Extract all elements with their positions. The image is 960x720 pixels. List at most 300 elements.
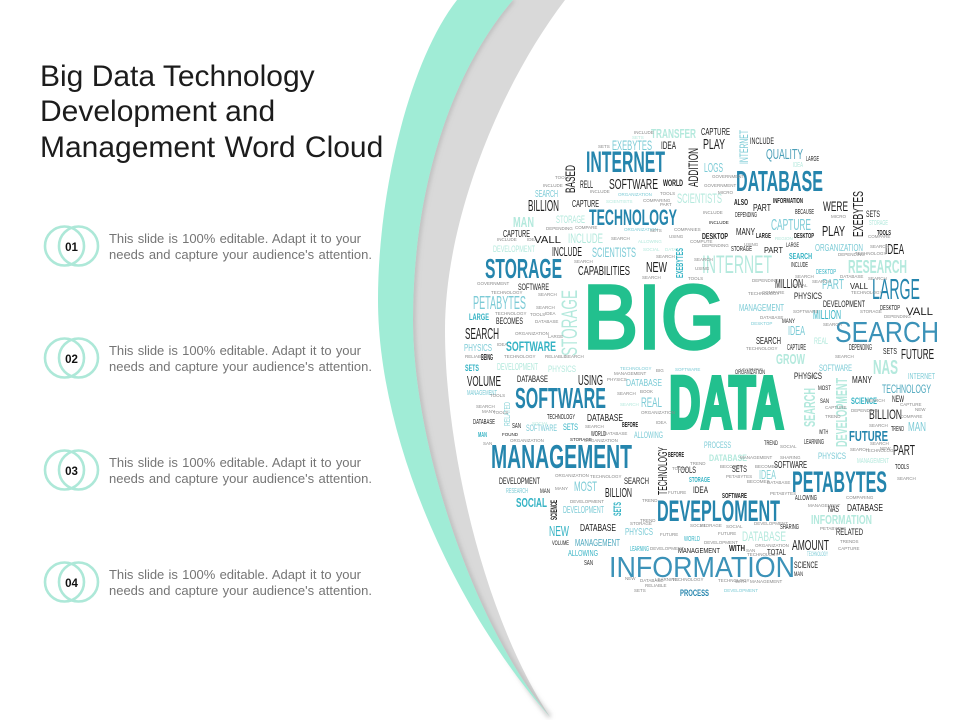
tiny filler words: DEPENDING — [546, 226, 573, 231]
tiny filler words: PHYSICS — [607, 377, 627, 382]
tiny filler words: LEARNING — [655, 577, 679, 582]
title: Development and — [40, 95, 275, 128]
black medium words: IDEA — [661, 140, 676, 152]
black medium words: RELATED — [836, 527, 863, 537]
tiny filler words: ORGANIZATION — [641, 410, 675, 415]
tiny filler words: TECHNOLOGY — [590, 474, 622, 479]
list item 04: needs and capture your audience's attention. — [109, 583, 372, 598]
blue and teal medium words: CAPTURE — [771, 217, 811, 234]
black medium words: SEARCH — [465, 326, 499, 343]
black medium words: TREND — [891, 426, 904, 433]
blue and teal medium words: PETABYTES — [473, 293, 526, 313]
tiny filler words: SCIENTISTS — [606, 199, 633, 204]
black medium words: PART — [764, 246, 783, 255]
tiny filler words: DATABASE — [604, 431, 627, 436]
tiny filler words: FUTURE — [668, 490, 686, 495]
tiny filler words: USING — [669, 234, 684, 239]
black medium words: EXEBYTES — [850, 191, 867, 237]
tiny filler words: INCLUDE — [590, 189, 610, 194]
word: RESEARCH: RESEARCH — [848, 257, 907, 277]
tiny filler words: TECHNOLOGY — [747, 552, 779, 557]
tiny filler words: ORGANIZATION — [624, 227, 658, 232]
tiny filler words: SEARCH — [538, 292, 557, 297]
black medium words: MANY — [736, 227, 755, 238]
tiny filler words: SEARCH — [823, 322, 842, 327]
blue and teal medium words: SETS — [612, 502, 624, 516]
tiny filler words: TECHNOLOGY — [491, 290, 523, 295]
black medium words: PART — [753, 203, 771, 214]
blue and teal medium words: RESEARCH — [506, 488, 528, 495]
mint medium words: MANAGEMENT — [857, 458, 889, 465]
mint medium words: TRANSFER — [651, 126, 696, 141]
blue and teal medium words: FUTURE — [849, 428, 888, 445]
tiny filler words: NEW — [625, 576, 636, 581]
tiny filler words: BECOMES — [720, 464, 743, 469]
tiny filler words: LEARNING — [740, 367, 764, 372]
tiny filler words: SETS — [632, 135, 644, 140]
blue and teal medium words: EXEBYTES — [612, 137, 652, 153]
black medium words: TOOLS — [895, 464, 909, 471]
black medium words: INCLUDE — [750, 136, 774, 146]
tiny filler words: DATABASE — [535, 319, 558, 324]
black medium words: TREND — [764, 441, 778, 447]
black medium words: CAPTURE — [572, 199, 599, 210]
black medium words: SOFTWARE — [518, 282, 549, 292]
tiny filler words: MANAGEMENT — [808, 503, 841, 508]
tiny filler words: USING — [695, 266, 710, 271]
black medium words: USING — [578, 372, 603, 389]
tiny filler words: SEARCH — [611, 236, 630, 241]
tiny filler words: FOUND — [502, 432, 519, 437]
tiny filler words: SETS — [650, 228, 662, 233]
tiny filler words: DATA — [665, 247, 676, 252]
tiny filler words: SEARCH — [642, 275, 661, 280]
blue and teal medium words: PHYSICS — [625, 527, 653, 538]
tiny filler words: REGION — [775, 236, 793, 241]
tiny filler words: MICRO — [718, 190, 733, 195]
blue and teal medium words: IDEA — [788, 323, 805, 338]
tiny filler words: COMPARING — [846, 495, 874, 500]
black medium words: MILLION — [775, 276, 803, 291]
tiny filler words: TECHNOLOGY — [748, 291, 780, 296]
tiny filler words: DEPENDING — [884, 314, 911, 319]
list item 01: needs and capture your audience's attention. — [109, 247, 372, 262]
black medium words: VOLUME — [552, 541, 569, 547]
tiny filler words: IDEA — [806, 374, 817, 379]
blue and teal medium words — [464, 130, 935, 598]
blue and teal medium words: SCIENTISTS — [592, 244, 636, 260]
list item 04: 04 — [65, 578, 78, 590]
black medium words: TOOLS — [677, 465, 696, 475]
black medium words: DATABASE — [587, 413, 623, 424]
word: SOFTWARE: SOFTWARE — [515, 383, 606, 415]
tiny filler words: ORGANIZATION — [555, 473, 589, 478]
black medium words: VALL — [534, 235, 561, 246]
word: STORAGE: STORAGE — [485, 253, 562, 284]
black medium words: LARGE — [786, 243, 799, 249]
title: Management Word Cloud — [40, 131, 383, 164]
tiny filler words: COMPARE — [575, 225, 597, 230]
black medium words: WITH — [729, 544, 745, 553]
mint medium words: INFORMATION — [811, 512, 872, 527]
tiny filler words: DEVELOPMENT — [570, 499, 604, 504]
blue and teal medium words: INTERNET — [908, 372, 935, 381]
tiny filler words: TOOLS — [688, 276, 703, 281]
black medium words: WERE — [823, 198, 848, 214]
black medium words: LARGE — [756, 233, 771, 240]
tiny filler words: SEARCH — [476, 404, 495, 409]
tiny filler words: SAN — [746, 548, 755, 553]
tiny filler words: PETABYTES — [726, 474, 752, 479]
tiny filler words: TECHNOLOGY — [504, 354, 536, 359]
black medium words: MANY — [782, 319, 795, 325]
tiny filler words: TECHNOLOGY — [718, 578, 750, 583]
black medium words: NEW — [646, 259, 668, 276]
blue and teal medium words: ALLOWING — [634, 430, 663, 440]
black medium words: BEFORE — [622, 422, 638, 429]
blue and teal medium words: DESKTOP — [816, 269, 836, 276]
blue and teal medium words: SOFTWARE — [526, 423, 557, 433]
tiny filler words: BECOMES — [747, 479, 770, 484]
black medium words: AMOUNT — [792, 537, 829, 554]
tiny filler words — [465, 130, 926, 593]
tiny filler words: DEVELOPMENT — [650, 546, 684, 551]
tiny filler words: SEARCH — [850, 447, 869, 452]
tiny filler words: DEPENDING — [838, 252, 865, 257]
blue and teal medium words: MOST — [574, 478, 597, 494]
word: DATA: DATA — [669, 361, 784, 444]
blue and teal medium words: STORAGE — [689, 477, 710, 484]
list item 02: needs and capture your audience's attention. — [109, 359, 372, 374]
black medium words: INCLUDE — [791, 262, 808, 269]
black medium words: MAN — [540, 489, 550, 495]
tiny filler words: SOCIAL — [791, 283, 808, 288]
tiny filler words: SEARCH — [536, 305, 555, 310]
black medium words: BASED — [562, 165, 578, 193]
blue and teal medium words: NEW — [549, 523, 569, 540]
black medium words: VOLUME — [467, 373, 501, 390]
tiny filler words: TOOLS — [493, 410, 508, 415]
tiny filler words: BOOK — [640, 389, 653, 394]
black medium words: BEING — [481, 353, 493, 362]
black medium words: BILLION — [869, 406, 902, 422]
mint medium words: DATABASE — [709, 453, 747, 463]
black medium words: DATABASE — [847, 503, 883, 514]
list item 01: 01 — [65, 242, 78, 254]
black medium words: DESKTOP — [702, 232, 728, 241]
black medium words: DATABASE — [580, 523, 616, 534]
black medium words: BEFORE — [668, 452, 684, 459]
tiny filler words: TECHNOLOGY — [672, 577, 704, 582]
blue and teal medium words: WORLD — [684, 536, 700, 543]
curved swoosh: grey band — [413, 0, 565, 717]
black medium words: WITH — [819, 430, 828, 436]
tiny filler words: GOVERNMENT — [704, 183, 737, 188]
tiny filler words: TECHNOLOGY — [865, 448, 897, 453]
tiny filler words: COMPARING — [643, 198, 671, 203]
tiny filler words: TOOLS — [555, 175, 570, 180]
black medium words: IDEA — [885, 241, 904, 258]
blue and teal medium words: SOFTWARE — [819, 363, 852, 373]
black medium words: SAN — [820, 399, 829, 405]
tiny filler words: BIG — [656, 368, 664, 373]
tiny filler words: PART — [660, 202, 672, 207]
tiny filler words: TECHNOLOGY — [620, 366, 652, 371]
blue and teal medium words: SETS — [563, 422, 578, 432]
list item 03: 03 — [65, 466, 78, 478]
tiny filler words: INCLUDE — [709, 220, 729, 225]
black medium words: TECHNOLOGY — [655, 447, 670, 495]
blue and teal medium words: MILLION — [813, 307, 841, 322]
tiny filler words: DEPENDING — [752, 278, 779, 283]
black medium words: DESKTOP — [880, 305, 900, 312]
black medium words: INCLUDE — [552, 244, 582, 259]
tiny filler words: TREND — [825, 414, 841, 419]
list item 02: This slide is 100% editable. Adapt it to your — [109, 343, 362, 358]
black medium words: PLAY — [822, 223, 845, 240]
blue and teal medium words: SCIENCE — [851, 396, 877, 406]
tiny filler words: STORAGE — [630, 521, 652, 526]
black medium words: SETS — [883, 347, 897, 356]
black medium words: BILLION — [605, 485, 632, 500]
tiny filler words: ORGANIZATION — [515, 331, 549, 336]
tiny filler words: TOOLS — [672, 466, 687, 471]
mint medium words: STORAGE — [556, 214, 585, 226]
tiny filler words: TECHNOLOGY — [851, 290, 883, 295]
tiny filler words: IDEA — [527, 237, 538, 242]
list item 04: This slide is 100% editable. Adapt it to your — [109, 567, 362, 582]
mint medium words: DATABASE — [742, 528, 786, 544]
word cloud — [464, 126, 939, 598]
mint medium words: IDEA — [759, 467, 776, 482]
list item 02 — [45, 338, 372, 378]
tiny filler words: CAPTURE — [825, 405, 847, 410]
list item 02: 02 — [65, 354, 78, 366]
black medium words: TOTAL — [767, 548, 786, 557]
list item 03: This slide is 100% editable. Adapt it to your — [109, 455, 362, 470]
tiny filler words: MANAGEMENT — [740, 455, 773, 460]
tiny filler words: DATABASE — [760, 315, 783, 320]
tiny filler words: COMPARE — [762, 290, 784, 295]
black medium words: MOST — [818, 386, 831, 392]
tiny filler words: TOOLS — [660, 191, 675, 196]
black medium words: CAPTURE — [701, 127, 730, 138]
black medium words: BILLION — [528, 198, 559, 215]
black medium words: ADDITION — [685, 148, 701, 187]
tiny filler words: SOCIAL — [532, 421, 549, 426]
blue and teal medium words: EXEBYTES — [675, 248, 686, 278]
black medium words — [465, 127, 934, 578]
tiny filler words: DEVELOPMENT — [704, 540, 738, 545]
tiny filler words: MANAGEMENT — [614, 371, 647, 376]
tiny filler words: SOFTWARE — [675, 367, 700, 372]
tiny filler words: MICRO — [831, 214, 846, 219]
mint medium words: GROW — [776, 351, 806, 368]
tiny filler words: INCLUDE — [497, 237, 517, 242]
tiny filler words: STORAGE — [570, 437, 592, 442]
black medium words: TECHNOLOGY — [547, 414, 575, 421]
list item 03: needs and capture your audience's attention. — [109, 471, 372, 486]
black medium words: DESKTOP — [794, 233, 814, 240]
black medium words: PHYSICS — [794, 291, 822, 301]
blue and teal medium words: REAL — [641, 394, 662, 410]
blue and teal medium words: DATABASE — [626, 378, 662, 389]
tiny filler words: DEVELOPMENT — [754, 521, 788, 526]
tiny filler words: SEARCH — [795, 274, 814, 279]
tiny filler words: SEARCH — [585, 424, 604, 429]
tiny filler words: SEARCH — [574, 259, 593, 264]
tiny filler words: GOVERNMENT — [477, 281, 510, 286]
tiny filler words: TECHNOLOGY — [495, 311, 527, 316]
tiny filler words: BECOMES — [755, 464, 778, 469]
tiny filler words: ORGANIZATION — [755, 543, 789, 548]
tiny filler words: RELIABLE — [465, 354, 487, 359]
tiny filler words: DEPENDING — [851, 408, 878, 413]
tiny filler words: TREND — [690, 461, 706, 466]
tiny filler words: TECHNOLOGY — [855, 251, 887, 256]
blue and teal medium words: ALLOWING — [568, 549, 598, 558]
tiny filler words: COMPANIES — [674, 227, 701, 232]
tiny filler words: PETABYTES — [820, 526, 846, 531]
black medium words: BECAUSE — [795, 209, 814, 216]
mint medium words: STORAGE — [869, 220, 888, 227]
blue and teal medium words: SEARCH — [535, 189, 558, 200]
tiny filler words: SEARCH — [812, 279, 831, 284]
tiny filler words: TECHNOLOGY — [746, 346, 778, 351]
list item 03 — [45, 450, 372, 490]
black medium words: VALL — [906, 306, 933, 318]
tiny filler words: DATABASE — [767, 480, 790, 485]
black medium words: MAN — [794, 572, 803, 578]
list item 04 — [45, 562, 372, 602]
tiny filler words: LARGE — [548, 334, 563, 339]
blue and teal medium words: LARGE — [469, 312, 489, 322]
mint medium words: INCLUDE — [568, 230, 603, 246]
word: DEVEPLOMENT: DEVEPLOMENT — [657, 495, 780, 528]
black medium words: SEARCH — [756, 336, 781, 347]
tiny filler words: DATABASE — [840, 274, 863, 279]
black medium words: SAN — [584, 560, 593, 567]
tiny filler words: SEARCH — [870, 441, 889, 446]
tiny filler words: NEW — [915, 407, 926, 412]
black medium words: RELL — [580, 179, 593, 191]
black medium words: SAN — [512, 423, 521, 430]
black medium words: BECOMES — [496, 316, 523, 326]
mint medium words: IDEA — [793, 162, 803, 169]
mint medium words: PHYSICS — [548, 364, 576, 374]
black medium words: MANY — [852, 375, 872, 386]
tiny filler words: RELIABLE — [545, 354, 567, 359]
blue and teal medium words: SOFTWARE — [506, 338, 556, 354]
tiny filler words: TREND — [642, 498, 658, 503]
word: INTERNET mint: INTERNET — [702, 251, 772, 279]
black medium words: SOFTWARE — [722, 493, 747, 500]
blue and teal medium words: PART — [822, 276, 844, 293]
tiny filler words: SOCIAL — [726, 524, 743, 529]
mint medium words: DEVELOPMENT — [493, 244, 535, 254]
blue and teal medium words: SETS — [465, 363, 479, 373]
tiny filler words: IDEA — [497, 342, 508, 347]
black medium words: DEVELOPMENT — [823, 299, 865, 309]
black medium words: SETS — [866, 209, 880, 219]
word: MANAGEMENT: MANAGEMENT — [491, 438, 632, 475]
word: DEVELOPMENT vertical: DEVELOPMENT — [834, 378, 851, 447]
mint medium words — [493, 126, 898, 544]
black medium words: SCIENCE — [794, 560, 818, 570]
black medium words: CAPTURE — [503, 229, 530, 240]
tiny filler words: DEPENDING — [702, 243, 729, 248]
mint medium words: DEVELOPMENT — [497, 362, 538, 373]
mint medium words: SCIENTISTS — [677, 190, 722, 206]
blue and teal medium words: LOGS — [704, 160, 723, 175]
black medium words: SHARING — [780, 524, 799, 531]
black medium words: ALSO — [734, 198, 748, 207]
word: DATABASE: DATABASE — [736, 166, 823, 198]
black medium words: DATABASE — [473, 419, 495, 426]
blue and teal medium words: ORGANIZATION — [815, 243, 863, 254]
tiny filler words: COMPUTE — [690, 239, 712, 244]
tiny filler words: MANAGEMENT — [750, 579, 783, 584]
tiny filler words: USING — [744, 242, 759, 247]
black medium words: ALLOWING — [795, 495, 817, 502]
word: TECHNOLOGY: TECHNOLOGY — [589, 205, 677, 230]
tiny filler words: CAPTURE — [900, 402, 922, 407]
word: STORAGE vertical: STORAGE — [557, 290, 582, 356]
tiny filler words: FUTURE — [660, 532, 678, 537]
word: SEARCH: SEARCH — [835, 317, 939, 349]
blue and teal medium words: PROCESS — [680, 588, 709, 598]
tiny filler words: IDEA — [656, 420, 667, 425]
blue and teal medium words: SEARCH — [789, 252, 812, 261]
black medium words: WORLD — [663, 178, 683, 188]
blue and teal medium words: TECHNOLOGY — [807, 552, 828, 558]
black medium words: TOOLS — [877, 230, 891, 237]
tiny filler words: DATABASE — [640, 578, 663, 583]
tiny filler words: SEARCH — [866, 398, 885, 403]
tiny filler words: STORAGE — [700, 523, 722, 528]
tiny filler words: MANY — [555, 486, 568, 491]
blue and teal medium words: MANAGEMENT — [575, 538, 620, 549]
tiny filler words: NEW — [880, 446, 891, 451]
list item 01: This slide is 100% editable. Adapt it to your — [109, 231, 362, 246]
black medium words: MANAGEMENT — [678, 548, 721, 555]
title: Big Data Technology — [40, 60, 315, 93]
tiny filler words: SEARCH — [835, 354, 854, 359]
tiny filler words: INCLUDE — [703, 210, 723, 215]
black medium words: ORGANIZATION — [735, 370, 765, 376]
blue and teal medium words: PROCESS — [704, 440, 731, 450]
black medium words: IDEA — [693, 485, 708, 495]
black medium words: PART — [893, 442, 915, 459]
black medium words: PLAY — [703, 136, 725, 153]
black medium words: VALL — [850, 282, 869, 291]
black medium words: STORAGE — [731, 246, 752, 253]
tiny filler words: COMPARE — [900, 414, 922, 419]
word: BIG: BIG — [583, 268, 725, 368]
blue and teal medium words: MANAGEMENT — [467, 390, 497, 397]
list item 01 — [45, 226, 372, 266]
tiny filler words: TRENDS — [840, 539, 859, 544]
tiny filler words: SHARING — [780, 455, 801, 460]
mint medium words: MAN — [513, 214, 534, 231]
tiny filler words: SOCIAL — [643, 247, 660, 252]
tiny filler words: CAPTURE — [838, 546, 860, 551]
tiny filler words: DEVELOPMENT — [724, 588, 758, 593]
tiny filler words: SEARCH — [617, 391, 636, 396]
tiny filler words: FUTURE — [718, 531, 736, 536]
black medium words: DEPENDING — [735, 212, 757, 219]
tiny filler words: STORAGE — [860, 309, 882, 314]
